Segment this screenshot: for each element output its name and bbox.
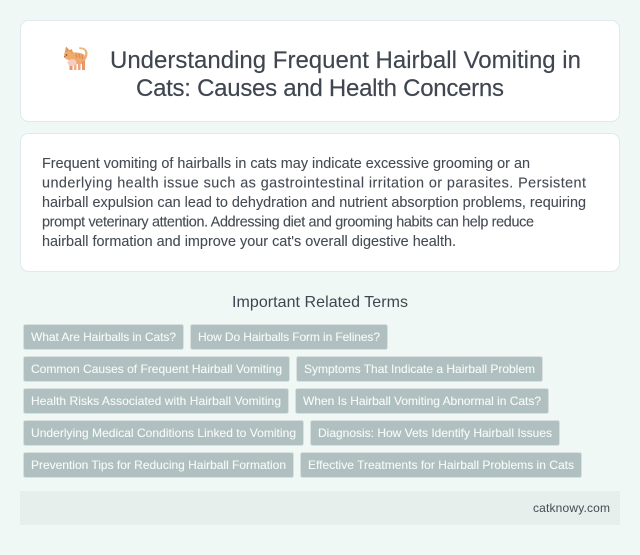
chip: When Is Hairball Vomiting Abnormal in Cats? bbox=[303, 394, 541, 408]
intro text: prompt veterinary attention. Addressing diet and grooming habits can help reduce bbox=[42, 214, 534, 230]
intro text: Frequent vomiting of hairballs in cats may indicate excessive grooming or an bbox=[42, 156, 530, 172]
footer bbox=[20, 491, 620, 525]
intro text: underlying health issue such as gastrointestinal irritation or parasites. Persistent bbox=[42, 176, 586, 192]
related terms chips bbox=[24, 324, 582, 478]
title bbox=[110, 47, 581, 102]
chip: What Are Hairballs in Cats? bbox=[31, 330, 176, 344]
panel: title card bbox=[20, 20, 620, 122]
chip: Effective Treatments for Hairball Problems in Cats bbox=[308, 458, 574, 472]
chip: Underlying Medical Conditions Linked to Vomiting bbox=[31, 426, 296, 440]
chip bbox=[24, 420, 304, 446]
chip: Prevention Tips for Reducing Hairball Formation bbox=[31, 458, 286, 472]
chip bbox=[300, 452, 582, 478]
chip bbox=[190, 324, 388, 350]
title: Understanding Frequent Hairball Vomiting in bbox=[110, 47, 581, 74]
intro text: hairball formation and improve your cat's overall digestive health. bbox=[42, 234, 456, 250]
chip bbox=[24, 356, 290, 382]
chip: Symptoms That Indicate a Hairball Problem bbox=[304, 362, 535, 376]
title: Cats: Causes and Health Concerns bbox=[136, 75, 504, 102]
icon: cat bbox=[64, 46, 88, 70]
panel: introduction bbox=[20, 134, 620, 272]
chip bbox=[24, 388, 288, 414]
heading: related terms: Important Related Terms bbox=[232, 294, 408, 311]
chip: Health Risks Associated with Hairball Vomiting bbox=[31, 394, 281, 408]
chip bbox=[296, 388, 548, 414]
intro text bbox=[42, 156, 586, 250]
chip bbox=[24, 452, 294, 478]
chip bbox=[24, 324, 184, 350]
intro text: hairball expulsion can lead to dehydration and nutrient absorption problems, requiring bbox=[42, 195, 586, 211]
chip: Common Causes of Frequent Hairball Vomiting bbox=[31, 362, 282, 376]
chip bbox=[296, 356, 542, 382]
chip bbox=[310, 420, 560, 446]
footer: catknowy.com bbox=[533, 501, 610, 515]
chip: How Do Hairballs Form in Felines? bbox=[198, 330, 380, 344]
chip: Diagnosis: How Vets Identify Hairball Issues bbox=[318, 426, 552, 440]
